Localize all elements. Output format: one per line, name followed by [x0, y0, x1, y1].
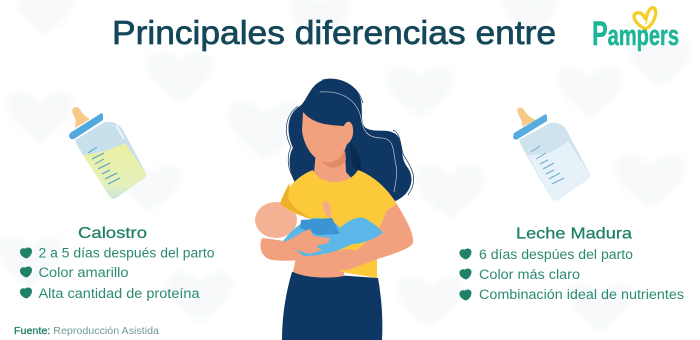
- hair outline: [286, 79, 414, 195]
- shirt shadow: [280, 183, 311, 219]
- mother and baby illustration: [255, 79, 414, 340]
- chin shadow: [320, 150, 346, 168]
- panel: calostro: [20, 225, 215, 301]
- heading: leche madura: Leche Madura: [516, 226, 632, 242]
- skirt: [282, 272, 382, 340]
- left arm: [260, 236, 322, 261]
- bullet list: Combinación ideal de nutrientes: [479, 287, 684, 302]
- right arm: [318, 204, 413, 270]
- hands: [283, 229, 330, 254]
- hair: [289, 79, 412, 205]
- title: Principales diferencias entre: [112, 14, 556, 51]
- shirt: [280, 170, 397, 278]
- baby darker clothes: [300, 218, 340, 235]
- bullet list: [459, 247, 684, 302]
- source note: Fuente: Reproducción Asistida: [14, 325, 159, 337]
- bullet list: Color amarillo: [38, 265, 128, 280]
- bullet list: 6 días despúes del parto: [479, 247, 633, 262]
- face: [302, 112, 353, 162]
- bullet list: [20, 246, 215, 301]
- logo: Pampers: [592, 8, 679, 53]
- hair highlight: [320, 92, 397, 192]
- heading: calostro: Calostro: [78, 225, 147, 242]
- hair shadow: [350, 143, 392, 202]
- bullet list: Color más claro: [479, 267, 580, 282]
- bullet list: Alta cantidad de proteína: [38, 286, 200, 301]
- bullet list: 2 a 5 días después del parto: [38, 246, 214, 260]
- neck and belly: [300, 152, 362, 190]
- baby foot: [323, 201, 331, 218]
- icon: leche madura bottle: [513, 108, 590, 201]
- baby head: [255, 202, 297, 238]
- icon: calostro bottle: [69, 107, 146, 199]
- icon: logo heart: [634, 8, 656, 29]
- panel: leche madura: [459, 226, 684, 302]
- baby blue body: [283, 218, 383, 256]
